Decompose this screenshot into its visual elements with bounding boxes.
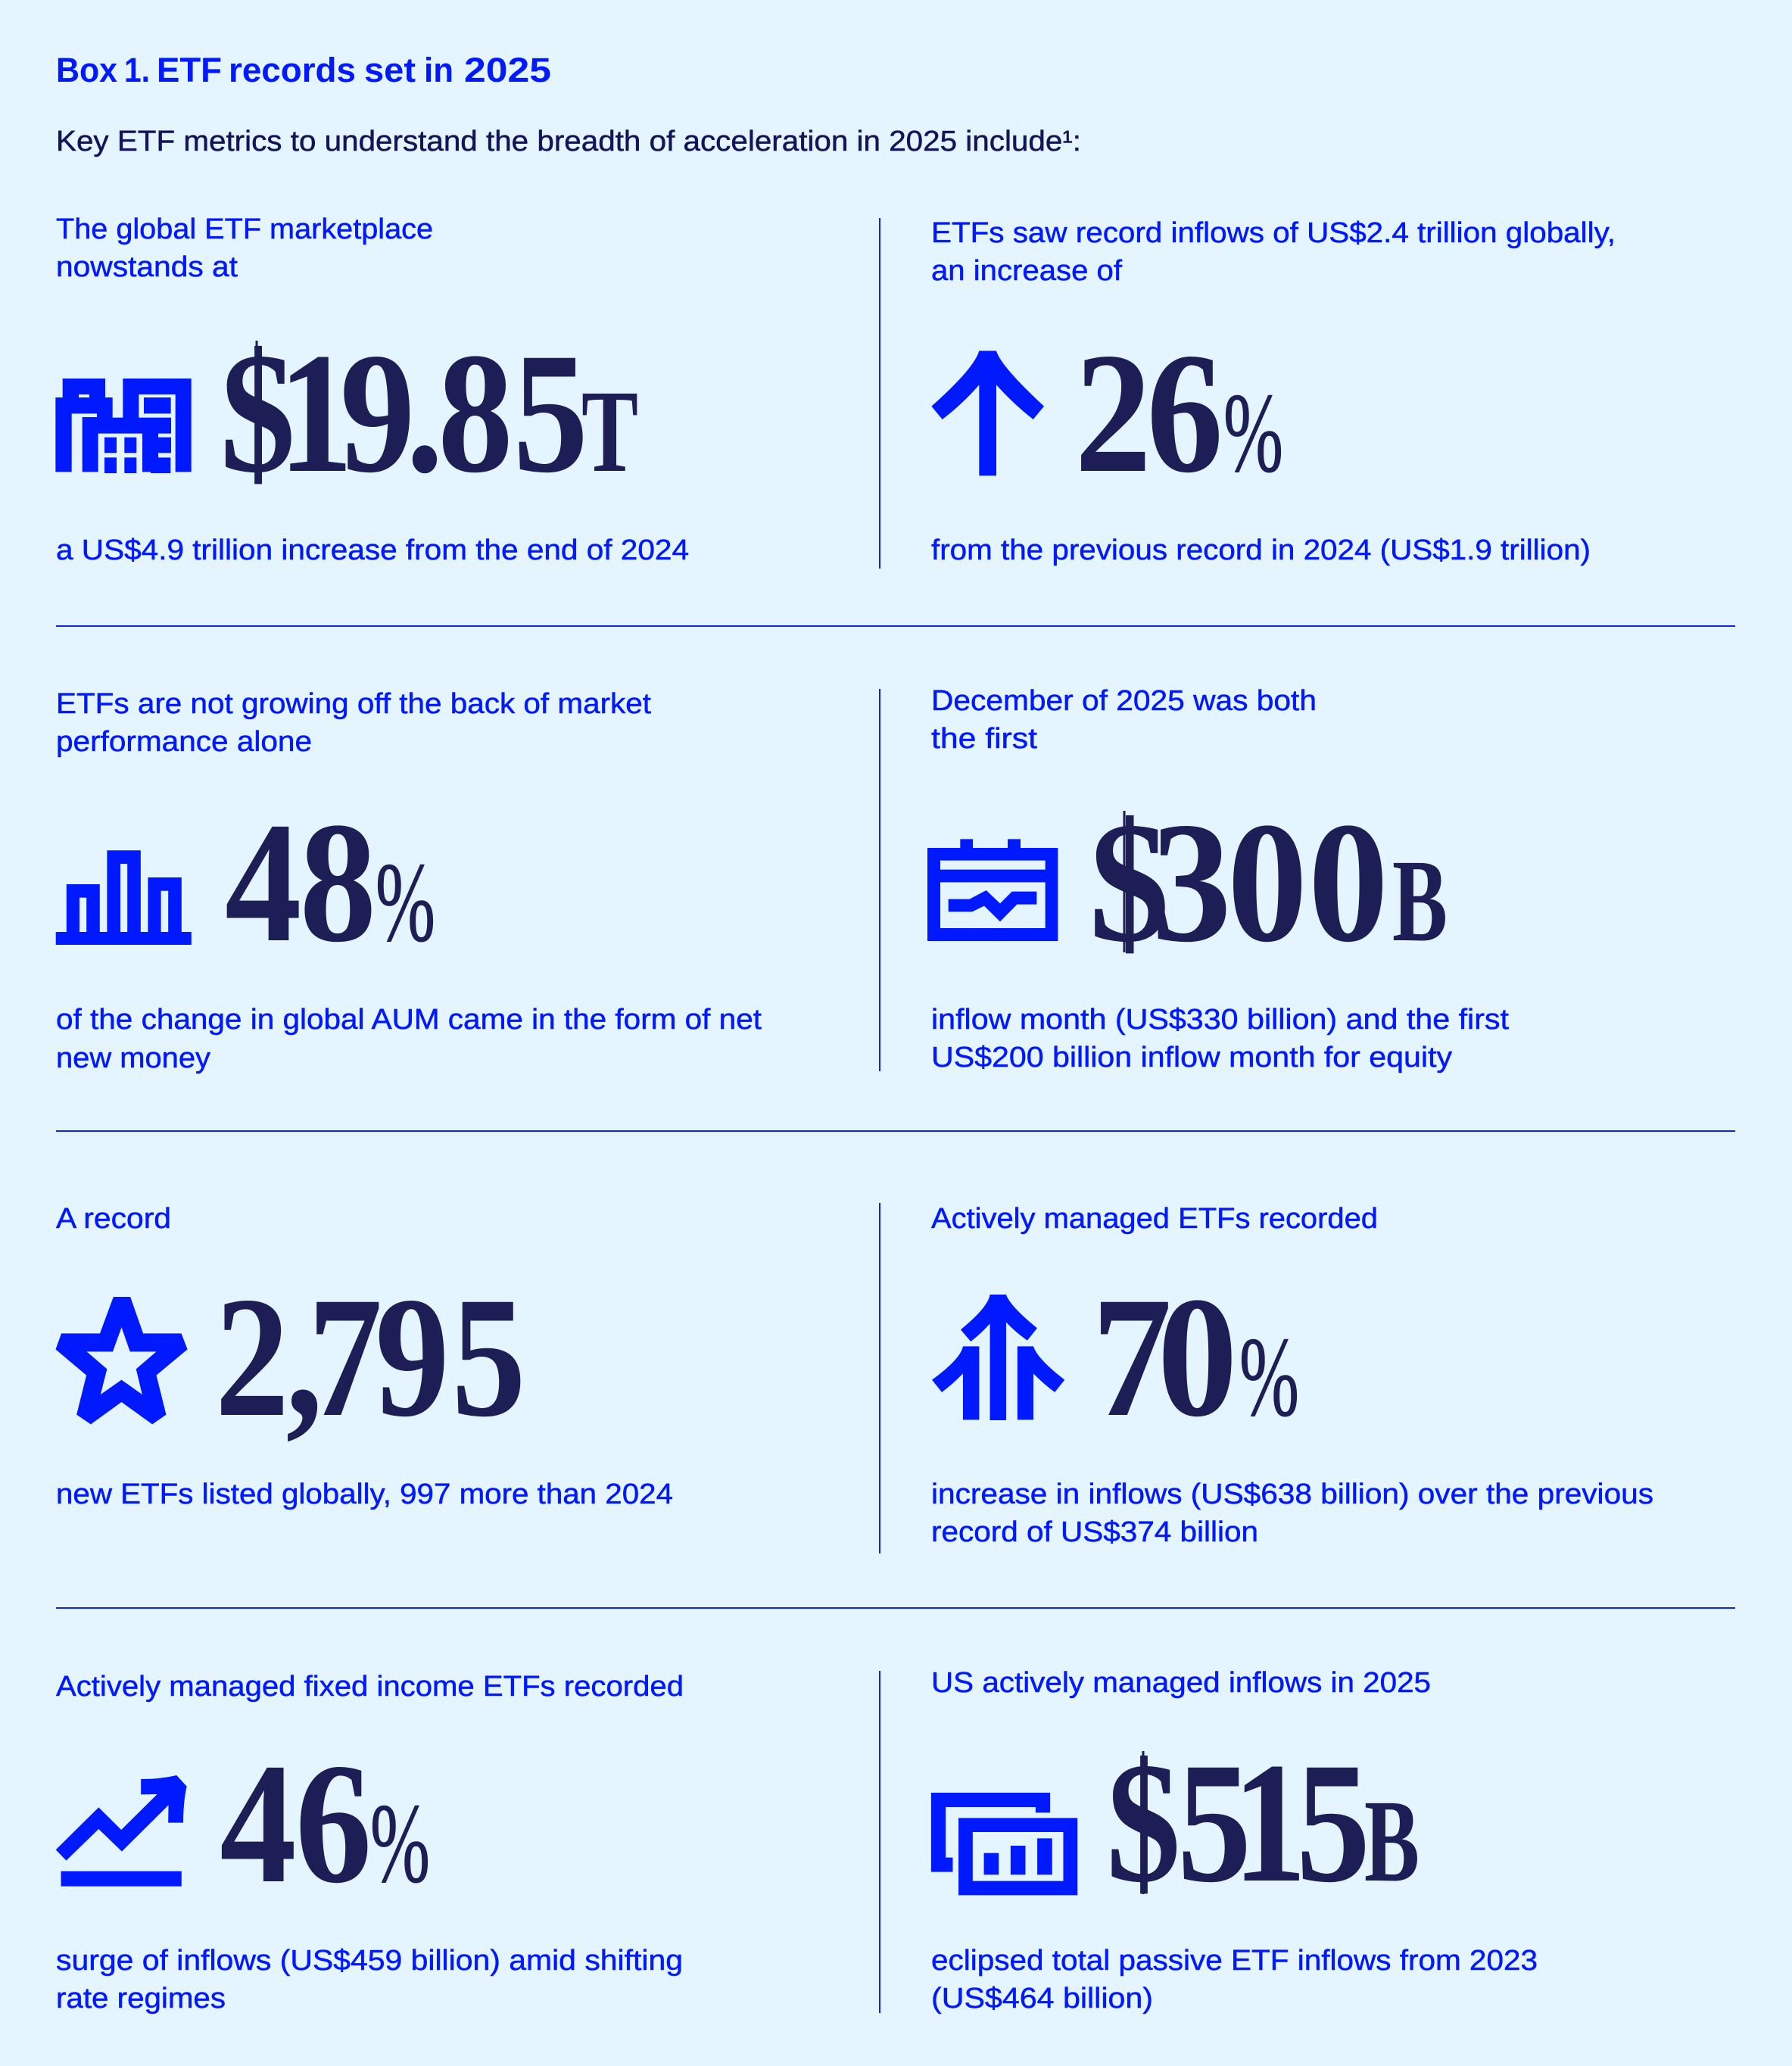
- intro sentence: Key ETF metrics to understand the breadth of acceleration in 2025 include¹:: [56, 126, 1081, 157]
- big number: 26%: %: [1223, 370, 1283, 496]
- big number: 48%: 48: [225, 787, 376, 978]
- icon: star: [55, 1297, 188, 1424]
- panel: actively managed ETFs: [931, 1203, 1653, 1548]
- lead text: The global ETF marketplace: [56, 213, 433, 245]
- lead text: US actively managed inflows in 2025: [931, 1667, 1431, 1699]
- note text: record of US$374 billion: [931, 1516, 1258, 1548]
- panel: new ETFs listed: [55, 1203, 673, 1510]
- lead text: [931, 217, 1616, 287]
- note text: (US$464 billion): [931, 1983, 1153, 2015]
- big number: 70%: %: [1239, 1314, 1299, 1440]
- big number: $515B: $515: [1106, 1727, 1370, 1918]
- icon: buildings: [55, 379, 192, 473]
- lead text: [56, 213, 433, 283]
- big number: 48%: %: [376, 840, 435, 965]
- big number: $300B: B: [1392, 835, 1448, 966]
- big number: 46%: 46: [220, 1728, 372, 1919]
- icon: triple arrows: [932, 1295, 1064, 1420]
- lead text: the first: [931, 723, 1037, 755]
- title: 1.: [124, 51, 150, 89]
- big number: 2,795: 2,795: [215, 1261, 526, 1452]
- lead text: [56, 688, 651, 758]
- title: ETF: [157, 51, 222, 89]
- big number: $19.85T: T: [581, 366, 638, 497]
- panel: global ETF marketplace: [55, 213, 689, 566]
- note text: new ETFs listed globally, 997 more than 2024: [56, 1479, 673, 1510]
- panel: market performance: [56, 688, 762, 1074]
- icon: bar chart: [56, 850, 192, 945]
- note text: US$200 billion inflow month for equity: [931, 1042, 1452, 1074]
- lead text: performance alone: [56, 726, 312, 758]
- title: 2025: [464, 51, 551, 89]
- note text: [56, 1945, 683, 2015]
- note text: of the change in global AUM came in the form of net: [56, 1004, 762, 1036]
- panel: December 2025: [927, 685, 1509, 1074]
- lead text: Actively managed fixed income ETFs recorded: [56, 1671, 684, 1703]
- icon: rising trend arrow: [56, 1775, 187, 1887]
- note text: increase in inflows (US$638 billion) over the previous: [931, 1479, 1653, 1510]
- note text: rate regimes: [56, 1983, 226, 2015]
- big number: 70%: 70: [1092, 1261, 1238, 1453]
- big number: $515B: B: [1364, 1775, 1420, 1906]
- note text: surge of inflows (US$459 billion) amid shifting: [56, 1945, 683, 1977]
- note text: a US$4.9 trillion increase from the end of 2024: [56, 534, 689, 566]
- title: in: [424, 51, 453, 89]
- lead text: an increase of: [931, 255, 1122, 287]
- note text: inflow month (US$330 billion) and the first: [931, 1004, 1509, 1036]
- lead text: December of 2025 was both: [931, 685, 1317, 717]
- note text: from the previous record in 2024 (US$1.9 trillion): [931, 534, 1591, 566]
- big number: 46%: %: [370, 1781, 430, 1906]
- lead text: ETFs are not growing off the back of market: [56, 688, 651, 720]
- note text: [931, 1479, 1653, 1548]
- title: [56, 51, 551, 89]
- lead text: [931, 685, 1317, 755]
- note text: [56, 1004, 762, 1074]
- big number: $300B: $300: [1089, 787, 1388, 978]
- panel: actively managed fixed income: [56, 1671, 684, 2015]
- icon: calendar with trend line: [927, 839, 1058, 941]
- panel: US actively managed inflows: [931, 1667, 1538, 2015]
- panel: record inflows: [931, 217, 1616, 566]
- title: records: [229, 51, 356, 89]
- note text: eclipsed total passive ETF inflows from 2023: [931, 1945, 1538, 1977]
- note text: new money: [56, 1042, 210, 1074]
- lead text: ETFs saw record inflows of US$2.4 trillion globally,: [931, 217, 1616, 249]
- note text: [931, 1945, 1538, 2015]
- big number: 26%: 26: [1075, 317, 1223, 509]
- big number: $19.85T: $19.85: [220, 318, 588, 509]
- note text: [931, 1004, 1509, 1074]
- icon: chart windows: [931, 1793, 1077, 1895]
- lead text: Actively managed ETFs recorded: [931, 1203, 1378, 1235]
- lead text: A record: [56, 1203, 171, 1235]
- icon: up arrow: [931, 351, 1044, 475]
- title: set: [364, 51, 416, 89]
- title: Box: [56, 51, 117, 89]
- lead text: nowstands at: [56, 251, 238, 283]
